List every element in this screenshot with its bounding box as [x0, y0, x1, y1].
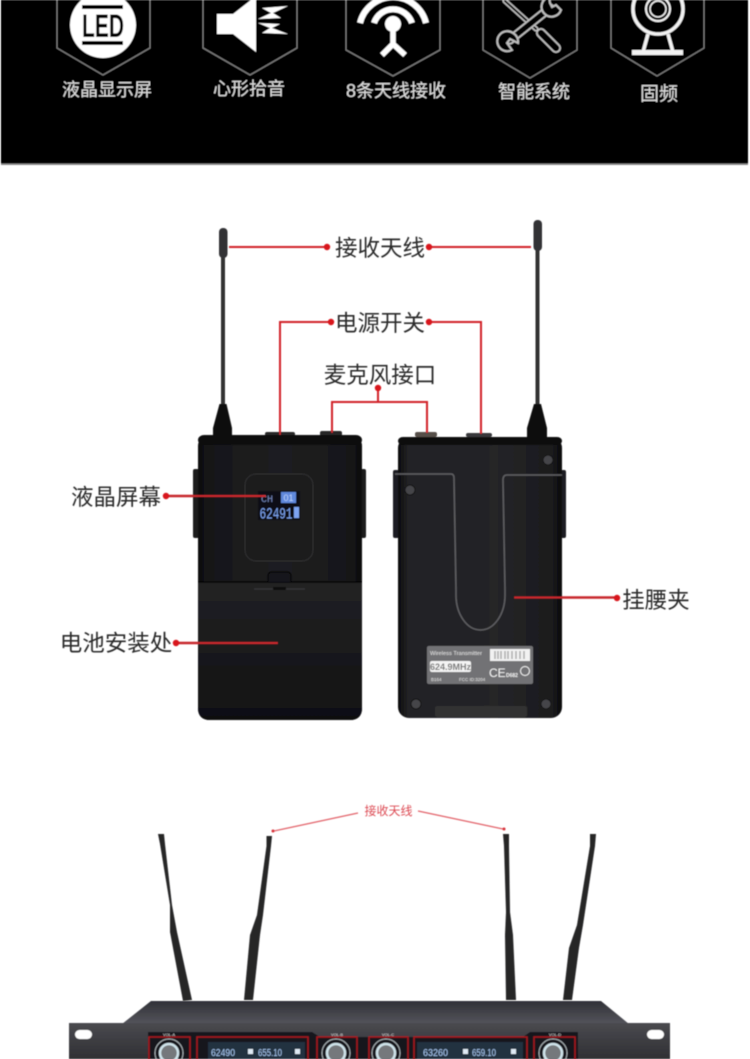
label: eight antennas: 8条天线接收 — [346, 81, 446, 101]
rear chassis — [122, 1001, 629, 1024]
label: LCD screen: 液晶显示屏 — [62, 80, 152, 100]
clip ears — [193, 469, 199, 538]
belt clip — [395, 474, 562, 630]
receiver antennas — [158, 834, 596, 1001]
label: smart system: 智能系统 — [498, 82, 570, 102]
battery cover — [198, 572, 362, 720]
control panel — [148, 1032, 578, 1059]
channel A knob — [149, 1032, 190, 1059]
LCD screen: 01 — [283, 493, 294, 503]
feature: LCD screen — [57, 0, 152, 100]
rack holes — [75, 1030, 92, 1039]
feature: fixed frequency — [611, 0, 704, 105]
LCD screen — [258, 491, 300, 524]
icon: speaker — [217, 0, 288, 52]
rating label: Wireless Transmitter — [430, 651, 482, 657]
callout: LCD screen — [71, 485, 266, 510]
top feature band — [1, 0, 748, 165]
screws — [405, 455, 553, 709]
rating label: CE — [489, 666, 506, 680]
callout: receiver antennas — [272, 803, 506, 832]
icon: wrench and screwdriver — [497, 0, 561, 51]
antenna: left — [213, 228, 232, 436]
housing — [198, 435, 362, 720]
antenna: right — [527, 220, 547, 437]
antenna 2 — [244, 836, 272, 1000]
screen bezel — [245, 474, 313, 561]
display left: 655.10 — [258, 1048, 282, 1059]
feature: smart system — [483, 0, 577, 102]
channel C knob: VOL-C — [382, 1032, 394, 1037]
callout: belt clip — [514, 588, 690, 613]
housing — [398, 437, 562, 718]
callout: receiver antennas: 接收天线 — [364, 803, 413, 818]
display right — [414, 1037, 527, 1059]
callout: power switch — [280, 311, 481, 435]
rating label — [427, 646, 533, 684]
callout: belt clip: 挂腰夹 — [622, 588, 690, 613]
display right: 63260 — [423, 1048, 448, 1059]
transmitter: back view — [393, 220, 566, 718]
feature: eight antennas — [346, 0, 446, 101]
callout: battery compartment: 电池安装处 — [60, 631, 172, 656]
callout: receiving antennas: 接收天线 — [335, 236, 425, 261]
feature: cardioid pickup — [203, 0, 297, 99]
label: cardioid pickup: 心形拾音 — [213, 79, 285, 99]
icon: LED: LED — [82, 8, 124, 44]
channel B knob — [317, 1032, 357, 1059]
antenna 1 — [158, 834, 192, 1001]
channel D knob — [534, 1032, 575, 1059]
LCD screen: CH — [261, 495, 273, 506]
callout: LCD screen: 液晶屏幕 — [71, 485, 161, 510]
display right: 659.10 — [472, 1048, 496, 1059]
label: fixed frequency: 固频 — [640, 83, 678, 105]
receiver rack unit — [69, 1001, 670, 1059]
antenna 4 — [563, 834, 596, 1000]
top controls — [265, 432, 295, 436]
callout: battery compartment — [60, 631, 278, 656]
callout: microphone jack: 麦克风接口 — [324, 363, 436, 388]
icon: antenna — [360, 0, 426, 55]
callout: microphone jack — [324, 363, 436, 433]
rating label: 624.9MHz — [430, 662, 472, 672]
top controls — [415, 432, 437, 437]
antenna 3 — [503, 834, 516, 1000]
callout: receiving antennas — [229, 236, 531, 261]
rating label: B164 — [431, 677, 442, 682]
channel D knob: VOL-D — [549, 1032, 561, 1037]
bottom tab — [435, 706, 527, 717]
front plate — [69, 1023, 670, 1059]
display left — [197, 1037, 308, 1059]
channel C knob — [369, 1032, 408, 1059]
rating label: FCC ID:3204 — [459, 677, 486, 682]
channel A knob: VOL-A — [163, 1032, 175, 1037]
LCD screen: 62491 — [260, 506, 292, 524]
channel B knob: VOL-B — [331, 1032, 343, 1037]
icon: webcam — [632, 0, 683, 52]
rating label: D682 — [506, 673, 518, 679]
transmitter: front view — [193, 228, 366, 720]
clip ears — [393, 470, 399, 538]
callout: power switch: 电源开关 — [335, 311, 425, 336]
display left: 62490 — [211, 1048, 235, 1059]
